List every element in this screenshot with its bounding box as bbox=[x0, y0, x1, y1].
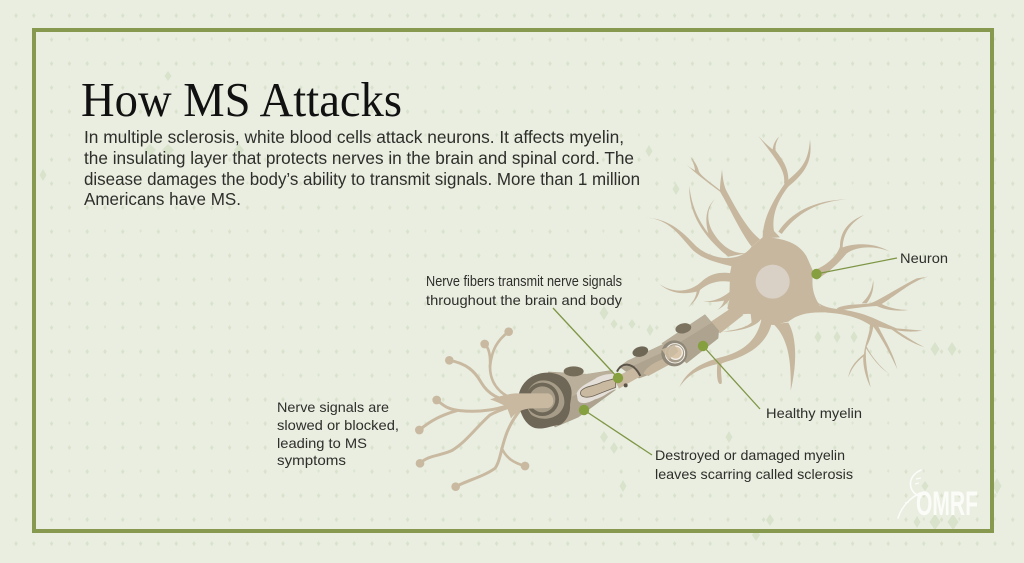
leader line: neuron bbox=[811, 258, 897, 279]
label: nerve fibers: Nerve fibers transmit nerve signals bbox=[426, 274, 622, 290]
label: healthy myelin: Healthy myelin bbox=[766, 405, 862, 421]
dendrites bbox=[644, 136, 928, 391]
label: destroyed myelin bbox=[655, 447, 853, 482]
cut end of axon bbox=[490, 373, 572, 429]
title: How MS Attacks bbox=[81, 72, 402, 127]
middle myelin segment bbox=[614, 344, 675, 389]
healthy ring cross-section bbox=[661, 340, 687, 366]
label: neuron: Neuron bbox=[900, 250, 948, 266]
label: nerve signals bbox=[277, 399, 399, 468]
label: nerve signals: Nerve signals are bbox=[277, 399, 389, 415]
damaged myelin segment bbox=[535, 366, 616, 427]
leader line: destroyed myelin bbox=[579, 405, 652, 455]
OMRF logo: OMRF bbox=[916, 485, 978, 523]
axon terminals bbox=[415, 327, 529, 491]
label: nerve signals: leading to MS bbox=[277, 435, 367, 451]
label: destroyed myelin: leaves scarring called sclerosis bbox=[655, 466, 853, 482]
intro paragraph bbox=[84, 127, 640, 209]
neuron cell body bbox=[718, 237, 840, 325]
label: nerve signals: symptoms bbox=[277, 452, 346, 468]
OMRF logo bbox=[898, 470, 978, 523]
nucleus bbox=[756, 265, 790, 299]
label: destroyed myelin: Destroyed or damaged myelin bbox=[655, 447, 845, 463]
axon with myelin sheath bbox=[490, 314, 719, 429]
intro paragraph: Americans have MS. bbox=[84, 189, 241, 209]
healthy myelin segment bbox=[662, 314, 719, 363]
intro paragraph: the insulating layer that protects nerves in the brain and spinal cord. The bbox=[84, 148, 634, 168]
label: nerve fibers: throughout the brain and body bbox=[426, 292, 622, 308]
leader line: healthy myelin bbox=[698, 341, 760, 409]
label: nerve fibers bbox=[426, 274, 622, 308]
intro paragraph: disease damages the body’s ability to transmit signals. More than 1 million bbox=[84, 169, 640, 189]
label: nerve signals: slowed or blocked, bbox=[277, 417, 399, 433]
intro paragraph: In multiple sclerosis, white blood cells attack neurons. It affects myelin, bbox=[84, 127, 624, 147]
neuron illustration bbox=[644, 136, 928, 391]
leader line: nerve fibers bbox=[553, 308, 623, 383]
